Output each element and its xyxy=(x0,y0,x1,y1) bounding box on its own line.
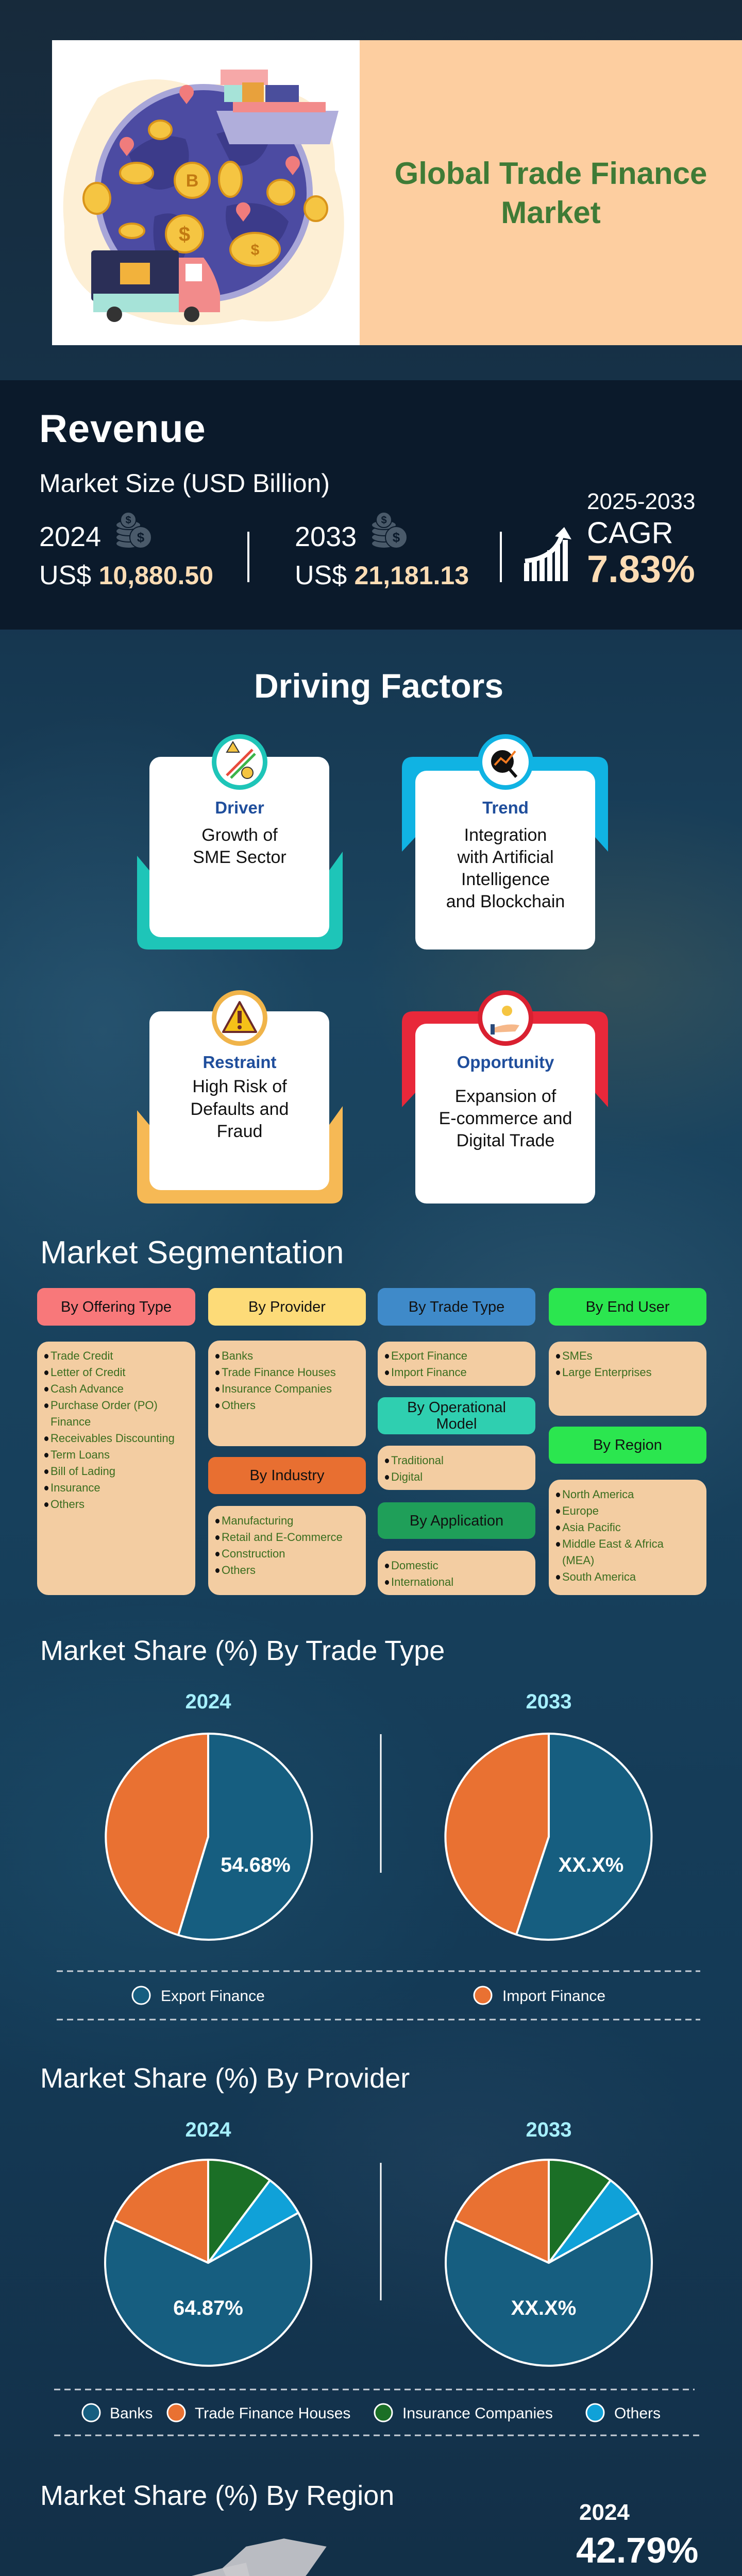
callout: asia pacific share: 42.79% xyxy=(576,2530,698,2570)
card: trend: Integration xyxy=(464,825,547,845)
segmentation: by end user and region: SMEs xyxy=(562,1349,593,1362)
segmentation: by end user and region: By Region xyxy=(593,1437,662,1453)
header illustration panel: $ xyxy=(179,223,190,246)
world map with pins xyxy=(192,2538,327,2576)
segmentation: by offering type: Purchase Order (PO) xyxy=(50,1399,158,1412)
segmentation: by provider and industry: Trade Finance Houses xyxy=(222,1366,336,1379)
segmentation: by offering type: By Offering Type xyxy=(61,1298,172,1315)
segmentation: by provider and industry: Manufacturing xyxy=(222,1514,293,1527)
chart: trade type pies: 2033 xyxy=(526,1690,571,1713)
segmentation: by provider and industry: Insurance Companies xyxy=(222,1382,332,1395)
card: opportunity: Digital Trade xyxy=(457,1131,554,1150)
card: opportunity xyxy=(402,990,608,1204)
callout: asia pacific share: 2024 xyxy=(579,2500,630,2525)
ship xyxy=(216,111,339,144)
chart: provider pies: XX.X% xyxy=(511,2297,576,2319)
segmentation: by end user and region: Large Enterprises xyxy=(562,1366,652,1379)
segmentation: by provider and industry: Retail and E-Commerce xyxy=(222,1531,343,1544)
segmentation: by provider and industry: Others xyxy=(222,1564,256,1577)
segmentation: by offering type: Cash Advance xyxy=(50,1382,124,1395)
segmentation: by trade type, operational model, application: Export Finance xyxy=(391,1349,467,1362)
segmentation: by trade type, operational model, application: Digital xyxy=(391,1470,423,1483)
card: trend: Trend xyxy=(482,798,529,817)
segmentation: by trade type, operational model, application: By Application xyxy=(410,1513,503,1529)
heading: market segmentation: Market Segmentation xyxy=(40,1235,344,1270)
segmentation: by end user and region: North America xyxy=(562,1488,634,1501)
segmentation: by trade type, operational model, application: International xyxy=(391,1575,453,1588)
stat 2024 xyxy=(39,513,213,590)
card: driver: Driver xyxy=(215,798,264,817)
header title panel xyxy=(360,40,742,345)
truck xyxy=(91,250,179,301)
legend: provider: Insurance Companies xyxy=(402,2405,553,2422)
card: opportunity: E-commerce and xyxy=(439,1109,572,1128)
heading: revenue: Revenue xyxy=(39,407,206,451)
callout: asia pacific share xyxy=(576,2500,698,2570)
card: restraint: Defaults and xyxy=(191,1099,289,1119)
segmentation: by end user and region: South America xyxy=(562,1570,636,1583)
segmentation: by provider and industry: By Industry xyxy=(249,1467,325,1484)
card: opportunity: Expansion of xyxy=(455,1087,556,1106)
segmentation: by end user and region: Asia Pacific xyxy=(562,1521,621,1534)
segmentation: by trade type, operational model, application: Import Finance xyxy=(391,1366,467,1379)
coins xyxy=(83,121,327,266)
segmentation: by trade type, operational model, application: Model xyxy=(436,1416,477,1432)
CAGR: 2025-2033 xyxy=(587,489,695,514)
icon: coins xyxy=(116,513,151,548)
card: restraint: Fraud xyxy=(217,1122,262,1141)
icon: coins: $ xyxy=(137,530,145,545)
chart: trade type pies: 2024 xyxy=(185,1690,231,1713)
segmentation: by offering type: Trade Credit xyxy=(50,1349,113,1362)
card: driver xyxy=(137,734,343,950)
segmentation: by end user and region: Europe xyxy=(562,1504,599,1517)
segmentation: by provider and industry xyxy=(208,1288,366,1595)
segmentation: by offering type: Bill of Lading xyxy=(50,1465,115,1478)
header illustration panel: $ xyxy=(251,242,260,259)
card: trend: Intelligence xyxy=(461,870,550,889)
segmentation: by end user and region xyxy=(549,1288,706,1595)
card: restraint: Restraint xyxy=(203,1053,277,1072)
stat 2033: 2033 xyxy=(295,521,357,552)
title: Global Trade Finance xyxy=(395,156,707,191)
globe xyxy=(94,84,313,302)
segmentation: by offering type: Finance xyxy=(50,1415,91,1428)
divider xyxy=(247,532,249,582)
segmentation: by provider and industry: Others xyxy=(222,1399,256,1412)
segmentation: by trade type, operational model, application: Domestic xyxy=(391,1559,439,1572)
legend: trade type: Export Finance xyxy=(161,1988,265,2005)
legend: trade type xyxy=(57,1970,700,2021)
CAGR: CAGR xyxy=(587,516,673,550)
card: opportunity: Opportunity xyxy=(457,1053,554,1072)
heading: driving factors: Driving Factors xyxy=(254,667,503,705)
legend: provider xyxy=(54,2388,699,2436)
card: driver: SME Sector xyxy=(193,848,286,867)
segmentation: by trade type, operational model, application: By Trade Type xyxy=(409,1298,504,1315)
header illustration panel: B xyxy=(186,171,198,191)
segmentation: by offering type: Insurance xyxy=(50,1481,100,1494)
chart: provider pies: 64.87% xyxy=(173,2297,243,2319)
segmentation: by trade type, operational model, application: By Operational xyxy=(407,1399,506,1416)
chart: provider pies: 2033 xyxy=(526,2119,571,2141)
segmentation: by offering type: Letter of Credit xyxy=(50,1366,126,1379)
chart: trade type pies xyxy=(105,1690,652,1941)
icon: coins: $ xyxy=(125,515,131,526)
icon: growth chart xyxy=(524,527,571,581)
stat 2024: US$ 10,880.50 xyxy=(39,561,213,590)
card: restraint: High Risk of xyxy=(192,1077,287,1096)
legend: provider: Trade Finance Houses xyxy=(195,2405,350,2422)
revenue panel xyxy=(0,380,742,630)
card: trend: with Artificial xyxy=(457,848,554,867)
title xyxy=(395,156,707,230)
stat 2024: 2024 xyxy=(39,521,101,552)
segmentation: by trade type, operational model, application: Traditional xyxy=(391,1454,444,1467)
card: driver: Growth of xyxy=(201,825,278,845)
segmentation: by offering type xyxy=(37,1288,195,1595)
segmentation: by provider and industry: Construction xyxy=(222,1547,285,1560)
segmentation: by trade type, operational model, application xyxy=(378,1288,535,1595)
segmentation: by end user and region: By End User xyxy=(586,1298,669,1315)
card: trend: and Blockchain xyxy=(446,892,565,911)
card: trend xyxy=(402,734,608,950)
cream blob xyxy=(63,79,344,325)
segmentation: by end user and region: Middle East & Africa xyxy=(562,1537,664,1550)
subheading: market size: Market Size (USD Billion) xyxy=(39,469,330,498)
heading: market share by trade type: Market Share (%) By Trade Type xyxy=(40,1635,445,1666)
chart: trade type pies: 54.68% xyxy=(221,1854,291,1876)
chart: trade type pies: XX.X% xyxy=(559,1854,623,1876)
chart: provider pies: 2024 xyxy=(185,2119,231,2141)
chart: provider pies xyxy=(104,2119,653,2367)
stat 2033: US$ 21,181.13 xyxy=(295,561,469,590)
icon: coins: $ xyxy=(393,530,400,545)
header illustration panel xyxy=(52,40,360,345)
segmentation: by end user and region: (MEA) xyxy=(562,1554,594,1567)
segmentation: by offering type: Term Loans xyxy=(50,1448,110,1461)
CAGR: 7.83% xyxy=(587,548,695,590)
legend: provider: Others xyxy=(614,2405,661,2422)
icon: coins xyxy=(372,513,407,548)
heading: market share by region: Market Share (%) By Region xyxy=(40,2480,394,2511)
divider xyxy=(500,532,502,582)
legend: trade type: Import Finance xyxy=(502,1988,605,2005)
segmentation: by provider and industry: By Provider xyxy=(248,1298,326,1315)
stat 2033 xyxy=(295,513,469,590)
card: restraint xyxy=(137,990,343,1204)
pins xyxy=(120,85,300,222)
legend: provider: Banks xyxy=(110,2405,153,2422)
icon: coins: $ xyxy=(381,515,387,526)
segmentation: by offering type: Others xyxy=(50,1498,85,1511)
segmentation: by offering type: Receivables Discounting xyxy=(50,1432,175,1445)
title: Market xyxy=(501,195,601,230)
CAGR xyxy=(587,489,695,590)
segmentation: by provider and industry: Banks xyxy=(222,1349,253,1362)
heading: market share by provider: Market Share (%) By Provider xyxy=(40,2063,410,2094)
